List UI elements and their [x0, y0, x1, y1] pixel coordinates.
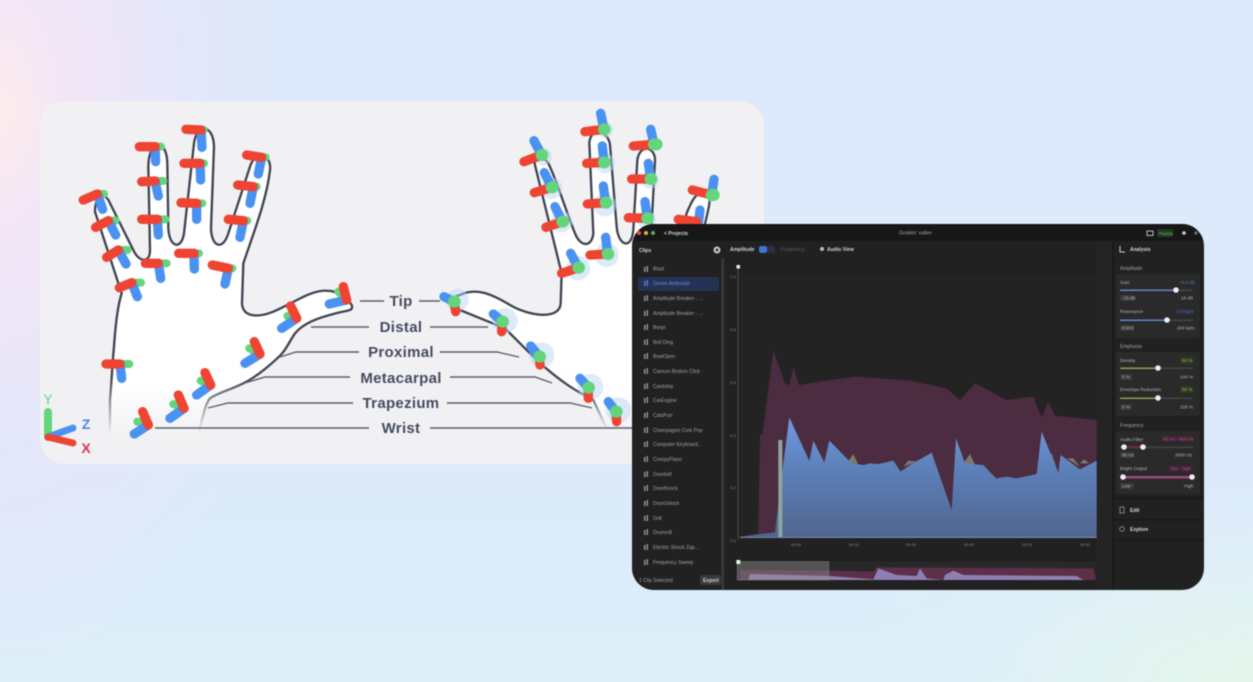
sidebar: clips list: DoorUnlock	[653, 501, 680, 507]
area chart	[730, 265, 1108, 580]
sidebar: clips list: Clips	[639, 248, 651, 254]
sidebar: clips list: Cannon Broken Click	[653, 369, 700, 375]
control group: emphasis: Emphasis	[1120, 344, 1142, 350]
panel: audio analysis app window	[632, 224, 1204, 590]
sidebar: clips list: Cardstep	[653, 384, 674, 390]
title bar: < Projects	[664, 231, 688, 237]
control group: amplitude: Gain	[1120, 280, 1130, 285]
sidebar: clips list: Computer Keyboard...	[653, 442, 702, 448]
label: Trapezium	[208, 395, 592, 412]
x axis labels: 00:15	[906, 542, 917, 547]
control group: emphasis: 0 %	[1122, 404, 1130, 410]
label: Tip	[360, 293, 440, 310]
label: Wrist: Wrist	[382, 420, 420, 437]
sidebar: clips list: Drill	[653, 516, 662, 522]
grey peaks behind blue area	[848, 454, 1090, 468]
sidebar: clips list: CatsPurr	[653, 413, 673, 419]
title bar	[632, 224, 1204, 241]
y axis labels: 0.8	[1102, 327, 1108, 332]
control group: frequency: Bright Output	[1120, 466, 1148, 471]
row: edit	[1119, 506, 1140, 514]
label: Distal: Distal	[380, 319, 422, 336]
x axis labels: 00:25	[1022, 542, 1033, 547]
control group: frequency: 60 Hz - 800 Hz	[1163, 436, 1194, 442]
control group: emphasis: 0 %	[1122, 374, 1130, 380]
control group: amplitude: 8 kHz	[1122, 326, 1134, 330]
control group: frequency: Low	[1122, 484, 1131, 488]
x axis labels: 00:20	[964, 542, 975, 547]
y axis labels: 0.8	[730, 327, 736, 332]
control group: frequency: 2000 Hz	[1175, 452, 1193, 458]
x axis labels: 00:05	[791, 542, 802, 547]
label: Proximal	[280, 344, 519, 361]
control group: emphasis: 50 %	[1182, 358, 1192, 363]
control group: amplitude: 170 kpts	[1176, 309, 1194, 314]
right hand	[444, 113, 750, 433]
title bar: Replay	[1159, 231, 1174, 236]
left hand outline	[95, 129, 352, 437]
sidebar: clips list	[632, 241, 724, 590]
control group: amplitude: Resonance	[1120, 309, 1144, 314]
control group: amplitude: +9.0 dB	[1179, 280, 1195, 285]
left hand	[83, 129, 352, 437]
control group: emphasis: Envelope Reduction	[1120, 387, 1162, 392]
sidebar: clips list: DoorKnock	[653, 486, 678, 492]
icon: XYZ axis: Z	[82, 416, 91, 432]
control group: frequency: 60 Hz	[1122, 452, 1135, 458]
sidebar: clips list: Electric Shock Zap...	[653, 545, 699, 551]
icon: XYZ axis: Y	[43, 391, 53, 407]
chart tabs	[730, 246, 854, 253]
control group: frequency: Frequency	[1120, 423, 1144, 429]
x axis labels: 00:30	[1080, 542, 1091, 547]
sidebar: clips list: Bell Ding	[653, 340, 673, 346]
y axis labels: 0.4	[1102, 433, 1108, 438]
row: explore: Explore	[1130, 527, 1149, 533]
y axis labels: 0.2	[1102, 485, 1108, 490]
control group: emphasis: 100 %	[1180, 404, 1193, 410]
sidebar: clips list: Champagne Cork Pop	[653, 428, 703, 434]
control group: frequency: low - high	[1171, 466, 1191, 471]
label: Proximal: Proximal	[368, 344, 434, 361]
chart tabs: Frequency	[781, 247, 805, 253]
control group: emphasis: Density	[1120, 358, 1136, 363]
y axis labels: 0.6	[730, 380, 736, 385]
y axis labels: 0.6	[1102, 380, 1108, 385]
control group: amplitude	[1116, 266, 1200, 338]
panel: hand skeleton card	[40, 101, 764, 464]
right panel: analysis controls	[1102, 246, 1199, 542]
sidebar: clips list: Amplitude Breaker - ...	[653, 311, 703, 317]
y axis labels: 1.0	[1102, 274, 1108, 279]
row: explore	[1118, 526, 1149, 532]
control group: emphasis	[1116, 344, 1200, 416]
sidebar: clips list: Frequency Sweep	[653, 560, 694, 566]
y axis labels	[730, 275, 736, 542]
blue frequency area	[740, 417, 1097, 537]
icon: XYZ axis: X	[81, 440, 91, 456]
chart tabs: Audio View	[827, 247, 854, 253]
sidebar: clips list: Blast	[653, 266, 665, 272]
y axis labels: 0.4	[730, 433, 736, 438]
x axis labels	[790, 543, 1090, 546]
x axis labels: 00:10	[849, 542, 860, 547]
y axis labels: 0.0	[730, 538, 736, 543]
sidebar: clips list: Drumroll	[653, 530, 672, 536]
control group: amplitude: Amplitude	[1120, 266, 1142, 272]
sidebar: clips list: Banjo	[653, 325, 666, 331]
sidebar: clips list: 1 Clip Selected	[639, 578, 673, 584]
label: Trapezium: Trapezium	[363, 395, 439, 412]
sidebar: clips list: Export	[703, 578, 719, 584]
title bar: Grokkin' vallen	[899, 230, 932, 236]
left thumb joints	[134, 287, 347, 434]
sidebar: clips list: Amplitude Breaker - ...	[653, 296, 703, 302]
sidebar: clips list: CarEngine	[653, 398, 677, 404]
y axis labels: 0.0	[1102, 538, 1108, 543]
minimap	[736, 560, 1097, 580]
sidebar: clips list: CreepyPiano	[653, 457, 682, 463]
control group: amplitude: -18 dB	[1122, 296, 1136, 300]
right hand joint halos	[446, 122, 718, 423]
chart tabs: Amplitude	[730, 247, 755, 253]
sidebar: clips list: BowOpen	[653, 354, 675, 360]
control group: frequency: High	[1184, 484, 1194, 488]
right hand outline	[452, 132, 750, 433]
left hand finger joints	[83, 129, 266, 378]
right panel: analysis controls: Analysis	[1130, 247, 1151, 253]
sidebar: clips list: Doorbell	[653, 472, 672, 478]
label: Metacarpal	[245, 370, 552, 387]
y axis labels: 1.0	[730, 274, 736, 279]
control group: frequency	[1116, 423, 1200, 494]
label: Metacarpal: Metacarpal	[360, 370, 442, 387]
control group: amplitude: 18 dB	[1181, 296, 1193, 300]
maroon amplitude area	[740, 350, 1097, 537]
row: edit: Edit	[1130, 508, 1140, 514]
control group: emphasis: 50 %	[1182, 387, 1192, 392]
control group: frequency: Audio Filter	[1120, 437, 1144, 442]
control group: emphasis: 100 %	[1180, 374, 1193, 380]
right hand finger joints	[444, 113, 714, 422]
icon: XYZ axis	[43, 391, 91, 456]
y axis labels: 0.2	[730, 485, 736, 490]
control group: amplitude: 200 kpts	[1177, 326, 1195, 330]
sidebar: clips list: Ocean Ambulate	[653, 281, 690, 287]
label: Tip: Tip	[389, 293, 413, 310]
